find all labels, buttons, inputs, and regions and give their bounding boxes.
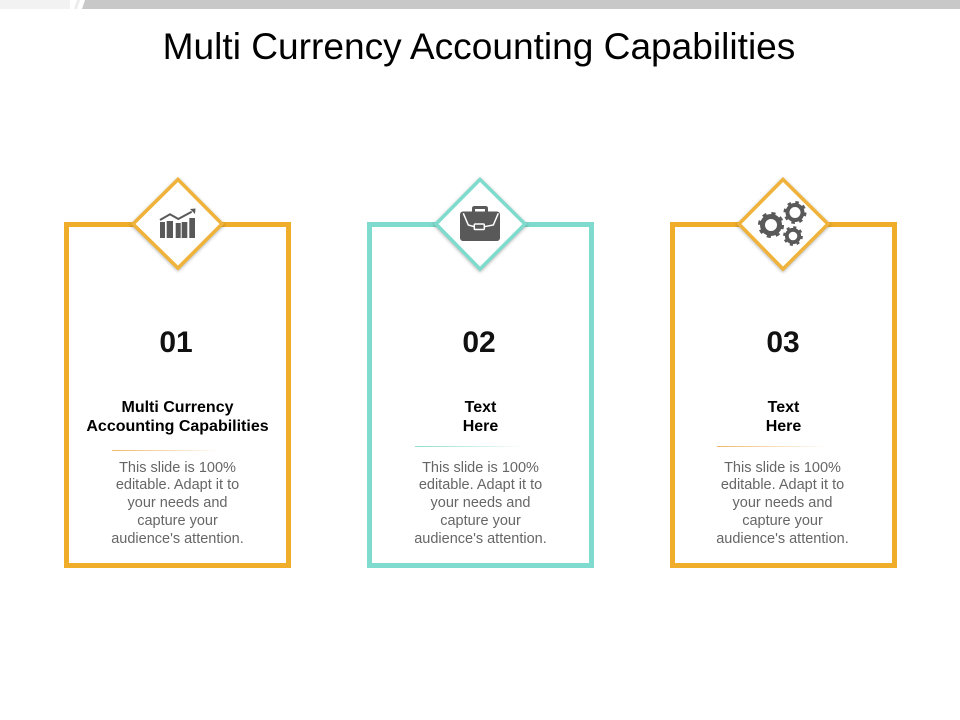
body text — [414, 460, 547, 546]
heading: Here — [463, 418, 498, 435]
card 2 border — [367, 222, 594, 568]
heading: Text — [465, 399, 496, 416]
body text: capture your — [742, 513, 823, 529]
heading: Here — [766, 418, 801, 435]
body text: editable. Adapt it to — [721, 477, 844, 493]
body text: This slide is 100% — [724, 460, 841, 476]
heading: Text — [768, 399, 799, 416]
heading: Accounting Capabilities — [86, 418, 269, 435]
heading — [766, 399, 801, 435]
heading — [86, 399, 269, 435]
body text: editable. Adapt it to — [116, 477, 239, 493]
body text: This slide is 100% — [422, 460, 539, 476]
number 03: 03 — [766, 326, 800, 359]
body text: capture your — [440, 513, 521, 529]
icon: briefcase in diamond — [432, 177, 528, 274]
heading — [463, 399, 498, 435]
title: Multi Currency Accounting Capabilities — [163, 25, 795, 67]
number 01: 01 — [159, 326, 193, 359]
body text: your needs and — [128, 495, 227, 511]
body text: your needs and — [431, 495, 530, 511]
card 1 border — [64, 222, 291, 568]
body text: capture your — [137, 513, 218, 529]
divider — [112, 450, 222, 451]
top decorative bar — [0, 0, 960, 9]
body text — [111, 460, 244, 546]
body text: editable. Adapt it to — [419, 477, 542, 493]
panel: card 2 — [367, 177, 594, 568]
body text: audience's attention. — [111, 530, 244, 546]
body text: audience's attention. — [716, 530, 849, 546]
body text: This slide is 100% — [119, 460, 236, 476]
number 02: 02 — [462, 326, 496, 359]
body text: your needs and — [733, 495, 832, 511]
divider — [717, 446, 827, 447]
panel: card 3 — [670, 177, 897, 568]
body text: audience's attention. — [414, 530, 547, 546]
heading: Multi Currency — [121, 399, 234, 416]
icon: chart in diamond — [130, 177, 226, 272]
divider — [415, 446, 525, 447]
body text — [716, 460, 849, 546]
panel: card 1 — [64, 177, 291, 568]
icon: gears in diamond — [736, 177, 832, 274]
card 3 border — [670, 222, 897, 568]
